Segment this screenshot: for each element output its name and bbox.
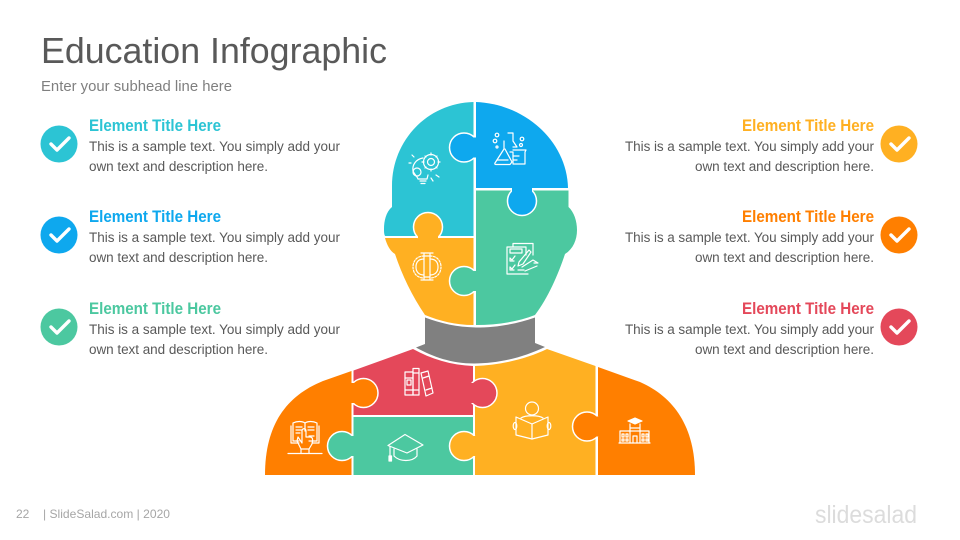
left item 2: Element Title Here: [89, 208, 221, 226]
subhead: Enter your subhead line here: [41, 78, 232, 95]
connector: green knob in orange: [328, 432, 358, 460]
left item 2: own text and description here.: [89, 250, 268, 265]
piece: red upper chest: [354, 349, 473, 415]
piece: green lower chest: [354, 417, 473, 475]
left item 1: This is a sample text. You simply add your: [89, 139, 340, 154]
puzzle figure: [265, 102, 695, 475]
left item 3: Element Title Here: [89, 300, 221, 318]
piece: green right face: [476, 190, 577, 325]
left item 1: own text and description here.: [89, 159, 268, 174]
right item 2: This is a sample text. You simply add your: [625, 230, 874, 245]
right item 3: This is a sample text. You simply add your: [625, 322, 874, 337]
icon: book and hand: [288, 422, 322, 454]
icon: phi symbol: [413, 253, 441, 280]
connector: orange knob in yellow: [572, 412, 603, 441]
connector: red knob in yellow: [466, 378, 497, 408]
icon: checklist with hand: [507, 244, 538, 274]
footer: page number and site: | SlideSalad.com | 2020: [43, 507, 170, 521]
connector: blue knob in green: [508, 184, 536, 216]
right item 1: [625, 117, 918, 174]
piece: yellow left face: [385, 238, 474, 325]
icon: gears in light bulb: [409, 153, 440, 184]
connector: blue knob in teal: [450, 133, 480, 162]
right item 1: This is a sample text. You simply add your: [625, 139, 874, 154]
right item 1: own text and description here.: [695, 159, 874, 174]
connector: yellow knob in teal: [414, 212, 442, 243]
left item 3: own text and description here.: [89, 342, 268, 357]
logo: slidesalad: slidesalad: [815, 501, 917, 529]
right item 3: Element Title Here: [742, 300, 874, 318]
piece: teal upper left head: [384, 102, 474, 236]
right item 3: [625, 300, 918, 357]
left item 1: [40, 117, 340, 174]
right item 2: Element Title Here: [742, 208, 874, 226]
icon: person reading book: [513, 402, 551, 439]
icon: lab flasks: [493, 133, 526, 164]
piece: yellow right chest: [475, 349, 596, 475]
left item 3: [40, 300, 340, 357]
piece: orange left shoulder: [265, 371, 352, 475]
piece: grey neck: [416, 318, 545, 364]
connector: yellow knob in green: [450, 432, 480, 460]
left item 3: This is a sample text. You simply add your: [89, 322, 340, 337]
connector: green knob in yellow: [450, 266, 480, 296]
piece: blue upper right head: [476, 102, 568, 188]
icon: school building: [619, 418, 650, 443]
piece: orange right shoulder: [598, 367, 695, 475]
left item 2: This is a sample text. You simply add your: [89, 230, 340, 245]
right item 2: [625, 208, 918, 265]
right item 2: own text and description here.: [695, 250, 874, 265]
footer: page number and site: 22: [16, 507, 30, 521]
title: Education Infographic: [41, 30, 387, 71]
left item 1: Element Title Here: [89, 117, 221, 135]
connector: orange knob in red: [347, 378, 378, 408]
icon: books: [405, 368, 433, 396]
icon: graduation cap: [388, 434, 423, 461]
left item 2: [40, 208, 340, 265]
right item 3: own text and description here.: [695, 342, 874, 357]
right item 1: Element Title Here: [742, 117, 874, 135]
